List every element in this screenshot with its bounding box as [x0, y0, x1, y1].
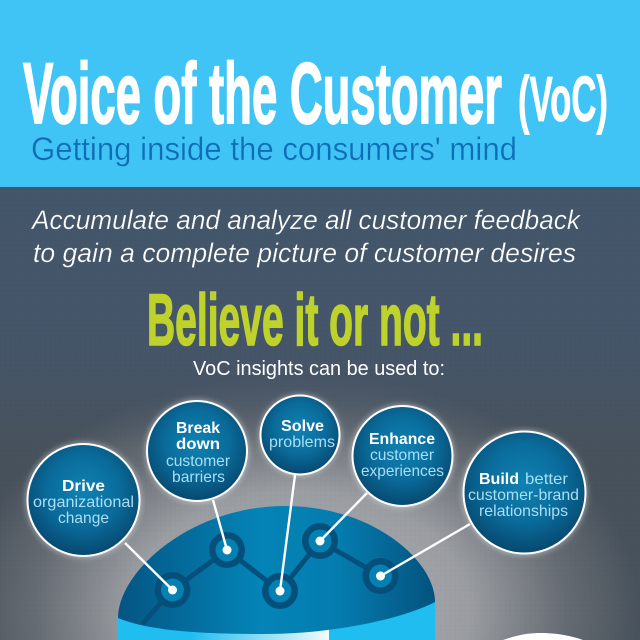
circle: build better customer-brand relationships	[462, 430, 588, 556]
white shape at bottom edge	[503, 633, 583, 640]
circle: build better customer-brand relationships: better	[525, 471, 569, 488]
circle: solve problems: Solve	[281, 418, 324, 435]
cylinder diagram	[118, 506, 435, 640]
intro text	[30, 205, 581, 268]
header band	[0, 0, 640, 187]
network line	[142, 541, 380, 624]
circle: drive organizational change: organizational	[33, 494, 134, 511]
circle: solve problems: problems	[269, 434, 335, 451]
circle: drive organizational change: Drive	[62, 478, 105, 495]
circle: drive organizational change	[26, 442, 142, 558]
circle: break down customer barriers	[145, 399, 249, 503]
circle: drive organizational change: change	[58, 510, 109, 527]
circle: break down customer barriers: barriers	[172, 469, 225, 486]
circle: enhance customer experiences: customer	[370, 447, 435, 464]
circle: build better customer-brand relationships: Build	[479, 471, 519, 488]
circle: break down customer barriers: down	[176, 436, 220, 453]
intro text: Accumulate and analyze all customer feedback	[30, 205, 581, 235]
network nodes	[154, 523, 398, 609]
circle: enhance customer experiences: Enhance	[369, 431, 435, 448]
circle: enhance customer experiences: experiences	[361, 463, 444, 480]
circle: solve problems	[259, 394, 341, 476]
subtitle: Getting inside the consumers' mind	[31, 131, 517, 167]
intro text: to gain a complete picture of customer desires	[33, 238, 576, 268]
circle: build better customer-brand relationships: customer-brand	[468, 487, 579, 504]
circle: build better customer-brand relationships: relationships	[479, 503, 568, 520]
circle: break down customer barriers: Break	[176, 420, 220, 437]
dome top	[118, 506, 435, 634]
connector lines	[125, 475, 470, 596]
circle: enhance customer experiences	[350, 404, 454, 508]
lead-in text: VoC insights can be used to:	[193, 357, 445, 380]
dark gradient background	[0, 187, 640, 640]
cylinder body	[118, 600, 435, 640]
circle: break down customer barriers: customer	[166, 453, 231, 470]
